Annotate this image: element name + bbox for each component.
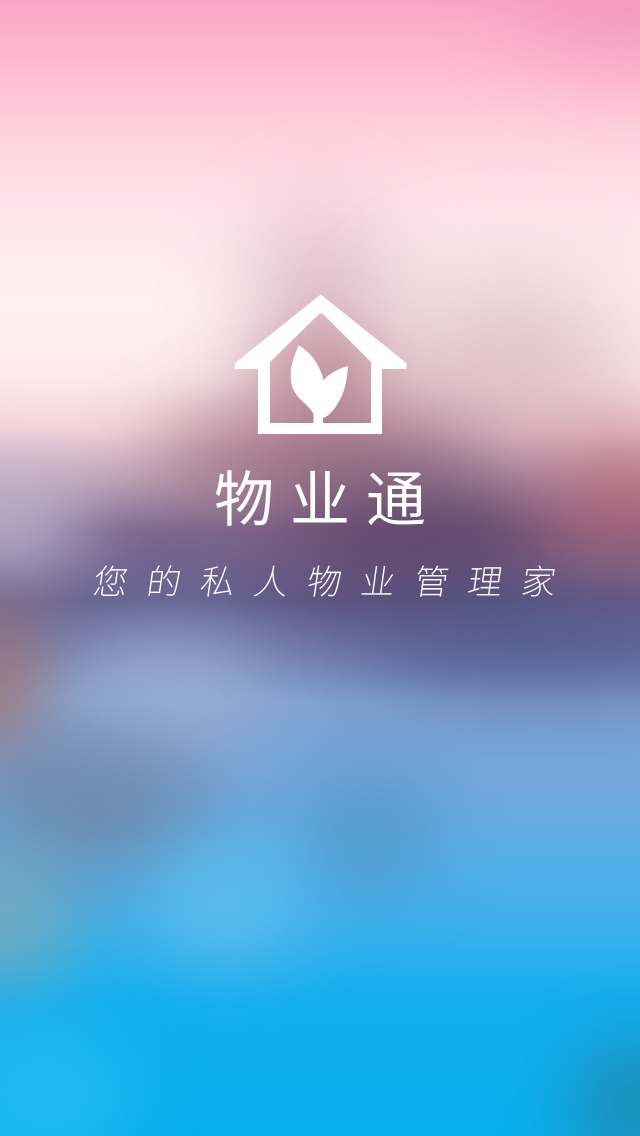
tagline: 您的私人物业管理家 <box>91 555 579 604</box>
leaf <box>291 346 348 423</box>
title: 物业通 <box>214 467 442 534</box>
house outline <box>235 294 406 434</box>
icon: house with leaf <box>235 294 406 434</box>
